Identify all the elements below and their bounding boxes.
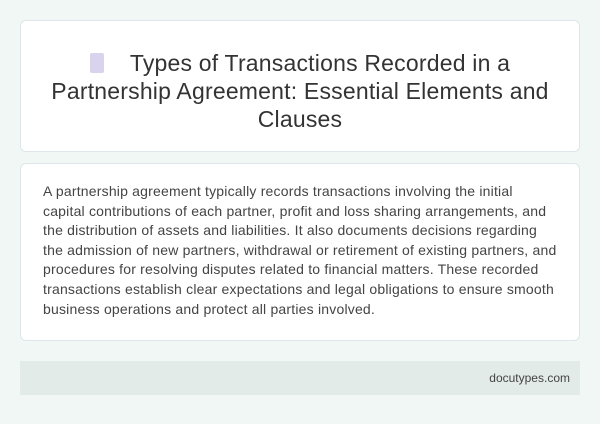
text block: the admission of new partners, withdrawal or retirement of existing partners, and bbox=[43, 242, 556, 258]
text block: transactions establish clear expectations and legal obligations to ensure smooth bbox=[43, 281, 554, 297]
icon: document bbox=[90, 53, 104, 73]
text block bbox=[43, 183, 556, 317]
text block: A partnership agreement typically records transactions involving the initial bbox=[43, 183, 513, 199]
text block: the distribution of assets and liabilities. It also documents decisions regarding bbox=[43, 222, 537, 238]
title: Types of Transactions Recorded in a Partnership Agreement: Essential Elements and Clauses bbox=[51, 50, 549, 132]
panel: title card bbox=[20, 20, 580, 152]
footer bbox=[20, 361, 580, 395]
text block: business operations and protect all parties involved. bbox=[43, 301, 375, 317]
text block: procedures for resolving disputes related to financial matters. These recorded bbox=[43, 261, 538, 277]
text block: capital contributions of each partner, profit and loss sharing arrangements, and bbox=[43, 203, 546, 219]
footer text: docutypes.com bbox=[489, 371, 570, 385]
panel: description bbox=[20, 163, 580, 341]
